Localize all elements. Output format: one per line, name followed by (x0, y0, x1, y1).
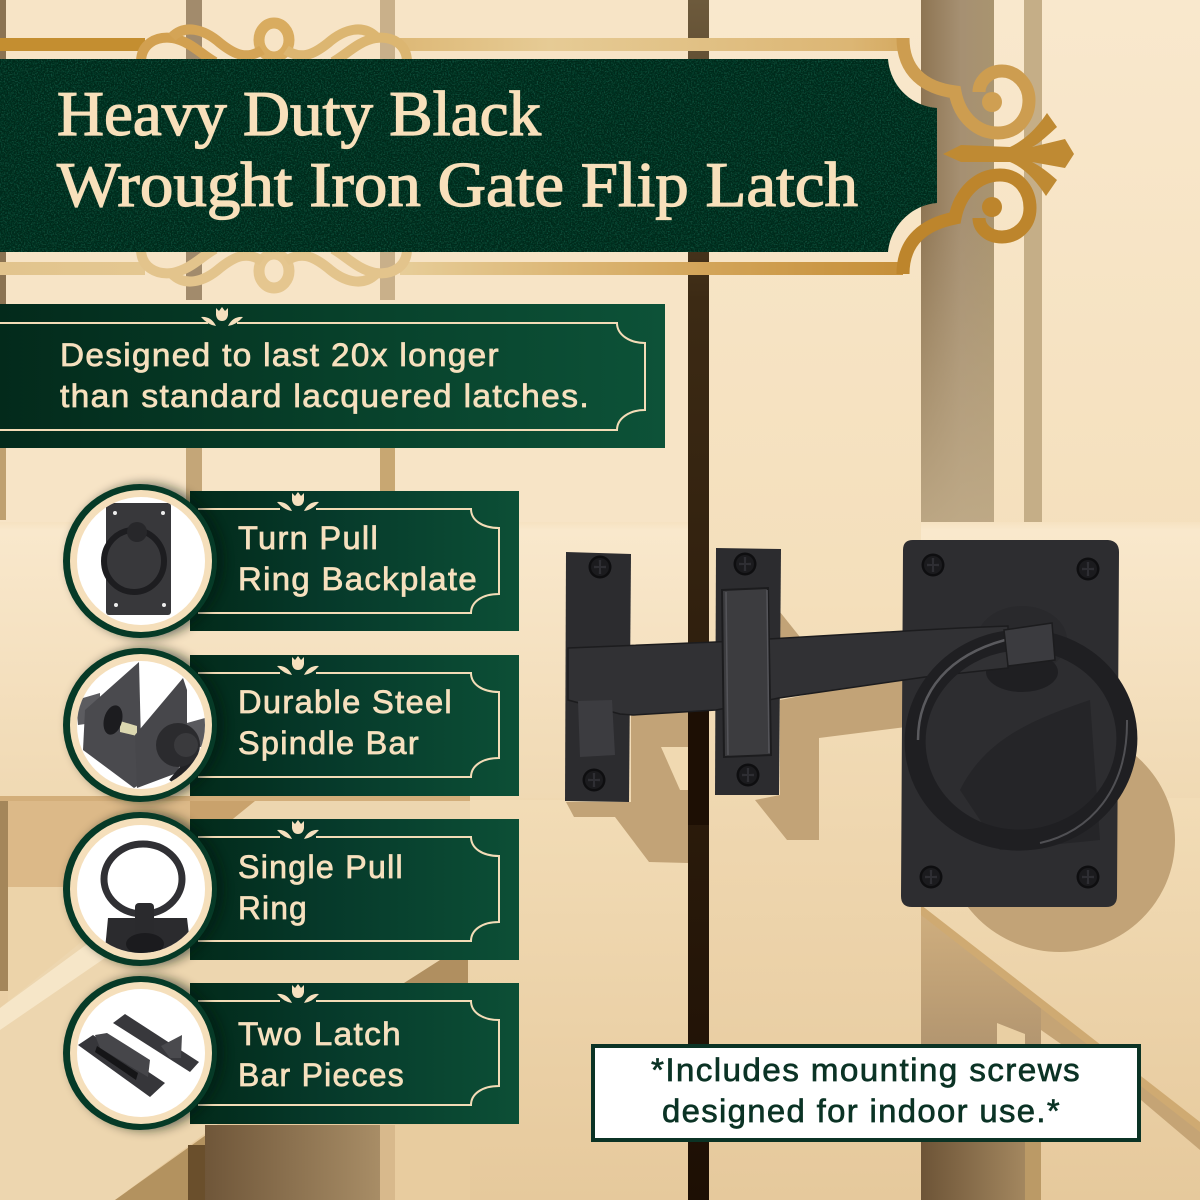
label: Turn Pull (238, 520, 379, 556)
label: Spindle Bar (238, 725, 420, 761)
latch bar (568, 626, 1008, 715)
gold frame top with ornament (0, 23, 903, 62)
icon: ring backplate (104, 503, 171, 615)
latch shadows on gate (566, 612, 1175, 952)
label: Single Pull (238, 849, 404, 885)
label (238, 520, 478, 597)
durability text: Designed to last 20x longer (60, 337, 500, 373)
label (238, 1016, 405, 1093)
label: Ring Backplate (238, 561, 478, 597)
label: Bar Pieces (238, 1057, 405, 1093)
label: Ring (238, 890, 308, 926)
left keeper plate (565, 552, 631, 802)
item: turn pull ring backplate (63, 483, 519, 639)
gold frame bottom with ornament (0, 249, 903, 288)
title text: Wrought Iron Gate Flip Latch (57, 149, 858, 220)
title text (57, 78, 858, 220)
note text: designed for indoor use.* (662, 1093, 1061, 1129)
catch (578, 700, 615, 757)
label: Two Latch (238, 1016, 402, 1052)
note box (593, 1046, 1139, 1140)
durability text: than standard lacquered latches. (60, 378, 590, 414)
icon: pull ring (104, 844, 192, 960)
durability text (60, 337, 590, 414)
main latch hardware (565, 540, 1140, 907)
label (238, 849, 404, 926)
icon: latch bar pieces (78, 1014, 199, 1097)
label (238, 684, 453, 761)
ring hasp (1004, 623, 1055, 666)
icon: spindle bar (76, 662, 205, 788)
label: Durable Steel (238, 684, 453, 720)
item: durable steel spindle bar (63, 647, 519, 803)
title text: Heavy Duty Black (57, 78, 541, 149)
right backplate (901, 540, 1119, 907)
middle plate (715, 548, 781, 795)
gold scroll ornament at right of title (903, 38, 1074, 274)
note text (651, 1052, 1081, 1129)
title banner (0, 59, 937, 252)
note text: *Includes mounting screws (651, 1052, 1081, 1088)
staple (722, 588, 771, 757)
item: single pull ring (63, 811, 519, 967)
item: two latch bar pieces (63, 975, 519, 1131)
pull ring (902, 626, 1140, 854)
panel: durability claim (0, 304, 665, 448)
